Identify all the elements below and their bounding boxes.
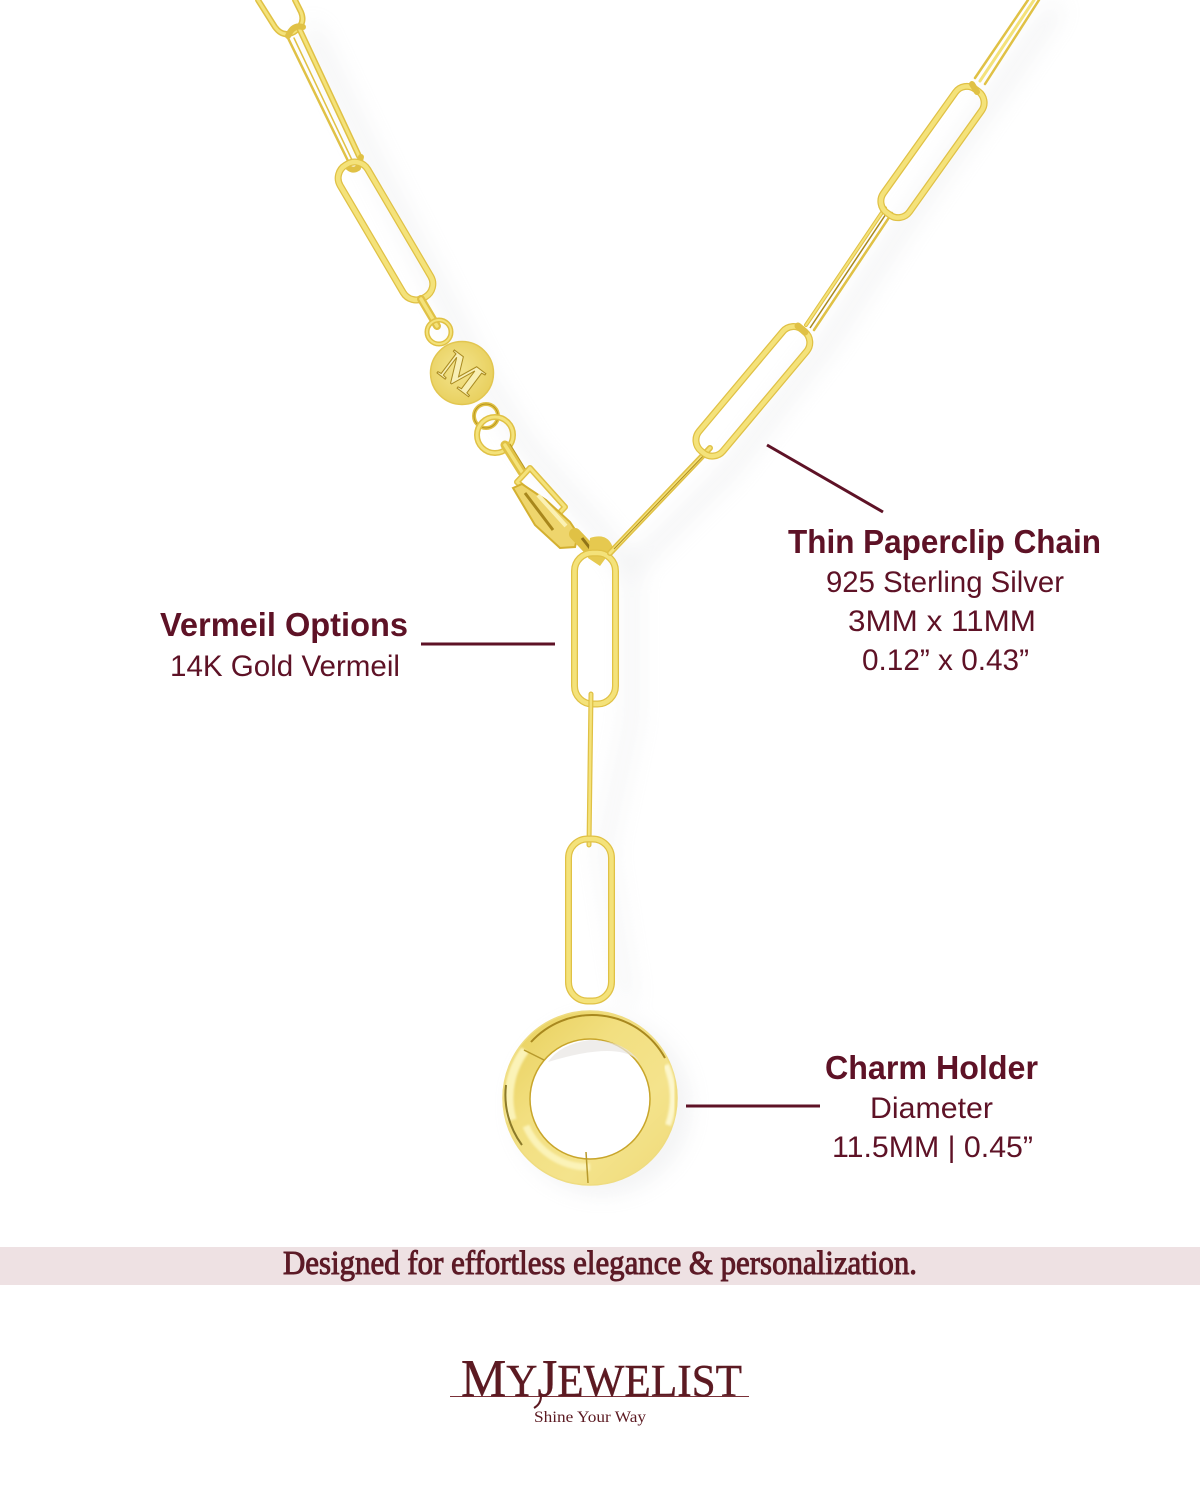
large left chain link <box>333 157 438 305</box>
charm holder ring <box>503 1011 677 1185</box>
logo wordmark: MYJEWELIST <box>461 1350 742 1408</box>
necklace <box>258 0 1039 1185</box>
brand logo <box>450 1350 749 1426</box>
top right chain link <box>972 0 1039 92</box>
tagline text: Designed for effortless elegance & personalization. <box>283 1245 917 1282</box>
logo rule <box>450 1396 749 1398</box>
top left chain link <box>258 0 302 34</box>
callout: charm holder <box>686 1049 1038 1164</box>
thin vertical bar link <box>589 694 591 845</box>
heading: Vermeil Options: Vermeil Options <box>160 606 408 643</box>
lower right paperclip link <box>690 321 816 462</box>
thin diagonal bar link <box>610 448 710 553</box>
narrow right chain link <box>798 208 892 332</box>
text: diameter size: 11.5MM | 0.45” <box>832 1131 1033 1164</box>
leader line: charm holder <box>686 1104 820 1108</box>
heading: Thin Paperclip Chain: Thin Paperclip Chain <box>788 523 1101 560</box>
text: vermeil material: 14K Gold Vermeil <box>170 650 400 683</box>
upper right paperclip link <box>875 81 990 223</box>
lower vertical paperclip link <box>568 839 612 1001</box>
leader line: vermeil <box>421 642 555 646</box>
connecting rings <box>474 404 526 472</box>
heading: Charm Holder: Charm Holder <box>825 1049 1038 1086</box>
logo tagline: Shine Your Way <box>534 1409 646 1426</box>
logo disc with M: M <box>430 341 493 405</box>
leader line: paperclip chain <box>767 445 883 512</box>
callout: thin paperclip chain <box>767 445 1101 677</box>
vertical paperclip link <box>574 553 616 704</box>
text: diameter label: Diameter <box>870 1092 993 1125</box>
jump rings above logo disc <box>421 299 451 344</box>
necklace shadow <box>312 10 1055 1182</box>
callout: vermeil options <box>160 606 555 683</box>
text: chain size in millimetres: 3MM x 11MM <box>848 605 1036 638</box>
logo J tail <box>534 1396 541 1408</box>
text: chain size in inches: 0.12” x 0.43” <box>862 644 1029 677</box>
lobster clasp <box>513 468 613 566</box>
narrow left chain link <box>288 26 361 170</box>
tagline banner <box>0 1245 1200 1285</box>
text: chain material: 925 Sterling Silver <box>826 566 1064 599</box>
